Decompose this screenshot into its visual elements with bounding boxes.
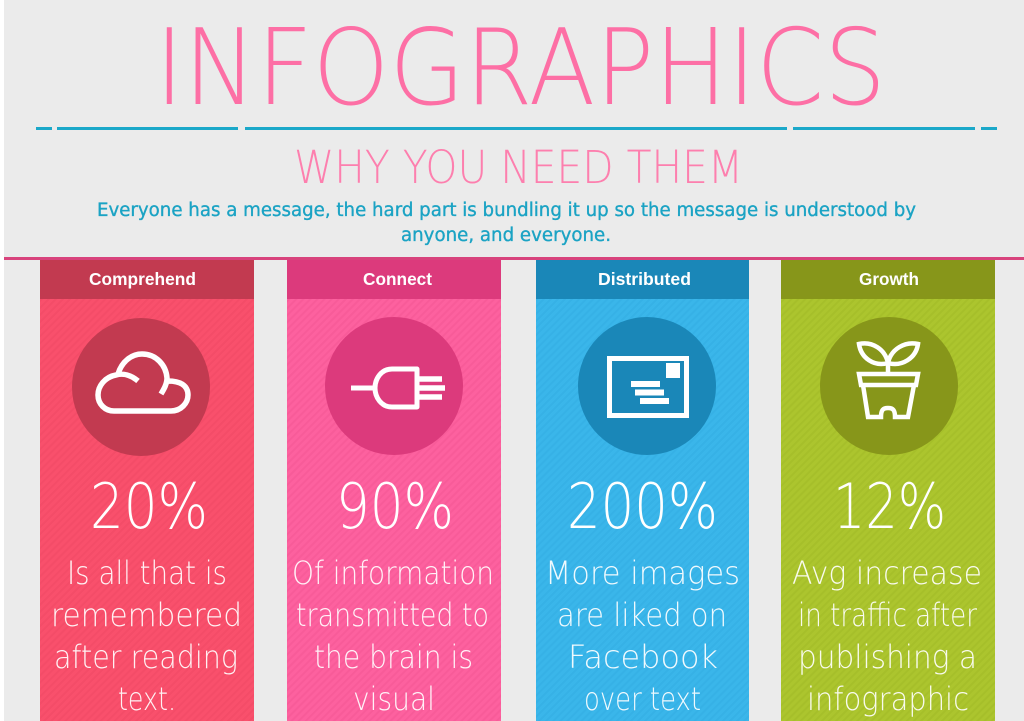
text: growth — [792, 554, 982, 718]
icon: plug — [325, 317, 463, 455]
text: distributed: More images — [545, 554, 740, 592]
stat: 90%: 90% — [336, 470, 454, 543]
stat: 12%: 12% — [833, 470, 946, 543]
text: comprehend: text. — [118, 680, 176, 718]
blue dashed divider — [36, 127, 997, 130]
icon: postcard — [578, 317, 716, 455]
panel: growth — [781, 260, 995, 721]
header: growth: Growth — [859, 269, 919, 289]
text: growth: infographic — [807, 680, 969, 718]
text: growth: Avg increase — [792, 554, 982, 592]
header: comprehend — [40, 260, 254, 299]
text: connect: the brain is — [314, 638, 473, 676]
icon: cloud — [72, 318, 210, 456]
header: distributed — [536, 260, 749, 299]
text: distributed: Facebook — [568, 638, 718, 676]
header: connect: Connect — [363, 269, 432, 289]
text: distributed — [545, 554, 740, 718]
text: connect: Of information — [292, 554, 494, 592]
intro text — [97, 200, 916, 246]
text: distributed: are liked on — [557, 596, 727, 634]
header: connect — [287, 260, 501, 299]
text: connect: visual — [353, 680, 435, 718]
text: connect: transmitted to — [296, 596, 489, 634]
text: distributed: over text — [584, 680, 701, 718]
intro text: anyone, and everyone. — [401, 225, 611, 246]
stat: 20%: 20% — [90, 470, 208, 543]
pink header rule — [4, 257, 1024, 260]
panel: distributed — [536, 260, 749, 721]
icon: plant pot — [820, 317, 958, 455]
text: comprehend: Is all that is — [67, 554, 227, 592]
title: INFOGRAPHICS — [155, 7, 886, 129]
text: comprehend: remembered — [51, 596, 242, 634]
intro text: Everyone has a message, the hard part is bundling it up so the message is understood by — [97, 200, 916, 221]
stat: 200%: 200% — [567, 470, 718, 543]
text: comprehend — [51, 554, 242, 718]
text: growth: publishing a — [798, 638, 977, 676]
header: growth — [781, 260, 995, 299]
text: growth: in traffic after — [798, 596, 978, 634]
text: comprehend: after reading — [54, 638, 238, 676]
text: connect — [292, 554, 494, 718]
header: distributed: Distributed — [598, 269, 691, 289]
panel: comprehend — [40, 260, 254, 721]
subtitle: WHY YOU NEED THEM — [294, 141, 743, 194]
panel: connect — [287, 260, 501, 721]
header: comprehend: Comprehend — [89, 269, 196, 289]
